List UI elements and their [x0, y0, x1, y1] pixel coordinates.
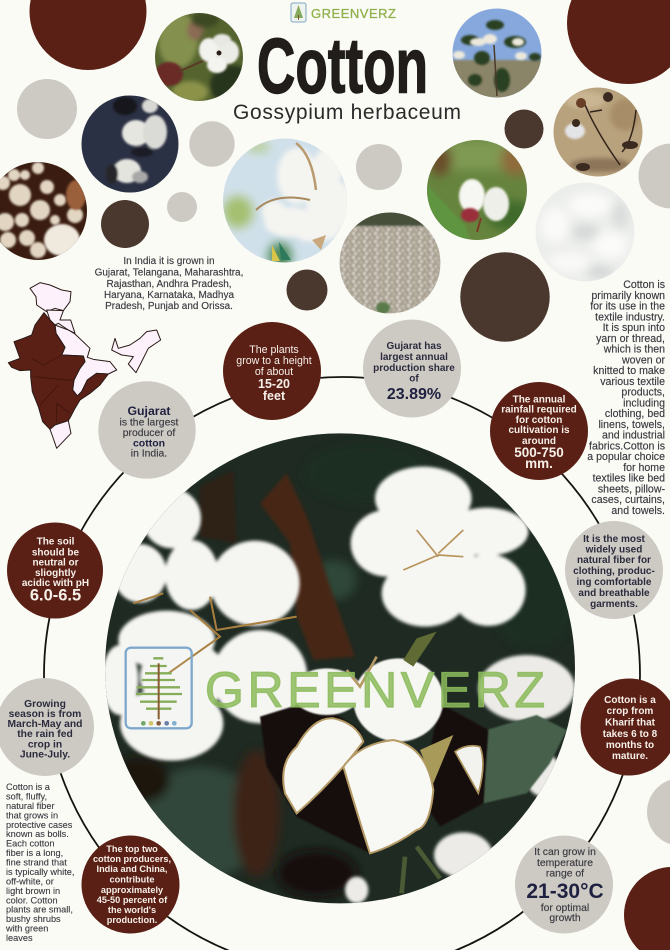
- info circle: most used natural fibre: ing comfortable: [576, 577, 652, 588]
- info circle: Gujarat largest producer: Gujarat: [127, 404, 171, 418]
- text: where cotton is grown in India: Pradesh, Punjab and Orissa.: [105, 301, 233, 312]
- text: what cotton is: light brown in: [6, 886, 60, 896]
- text: what cotton is: off-white, or: [6, 876, 54, 886]
- info circle: Kharif crop: Kharif that: [605, 718, 656, 728]
- info circle: most used natural fibre: garments.: [590, 599, 638, 610]
- info circle: top two producers: 45-50 percent of: [97, 895, 168, 905]
- info circle: temperature range: It can grow in: [534, 847, 596, 858]
- subtitle: Gossypium herbaceum: [233, 101, 461, 124]
- text: uses of cotton: and towels.: [611, 505, 665, 517]
- info circle: annual rainfall: cultivation is: [508, 425, 570, 436]
- text: what cotton is: Each cotton: [6, 839, 55, 849]
- info circle: annual rainfall: for cotton: [516, 415, 562, 426]
- text: uses of cotton: fabrics.Cotton is: [589, 440, 665, 452]
- info circle: growing season: [0, 678, 94, 776]
- watermark logo box: [126, 648, 192, 728]
- info circle: annual rainfall: rainfall required: [501, 404, 577, 416]
- photo: white cotton against sky: [223, 138, 347, 262]
- brown dried leaf: [260, 473, 355, 660]
- central boll: [260, 700, 370, 853]
- text: uses of cotton: knitted to make: [593, 365, 665, 377]
- info circle: most used natural fibre: It is the most: [583, 534, 646, 545]
- photo: cotton plant under blue sky: [452, 8, 542, 100]
- text: what cotton is: natural fiber: [6, 801, 55, 811]
- info circle: soil pH: neutral or: [32, 558, 79, 568]
- info circle: Gujarat largest producer: [98, 381, 196, 479]
- text: what cotton is: leaves: [6, 933, 33, 943]
- text: uses of cotton: which is then: [603, 344, 665, 356]
- info circle: most used natural fibre: widely used: [585, 544, 642, 556]
- text: what cotton is: protective cases: [6, 820, 73, 830]
- info circle: growing season: March-May and: [8, 719, 82, 730]
- info circle: plant height: grow to a height: [236, 355, 312, 367]
- info circle: top two producers: contribute: [110, 874, 154, 884]
- text: what cotton is: fine strand that: [6, 858, 67, 868]
- info circle: Gujarat largest producer: cotton: [133, 438, 165, 450]
- info circle: growing season: Growing: [24, 699, 66, 710]
- text: uses of cotton: various textile: [600, 376, 665, 388]
- text: what cotton is: Cotton is a: [6, 782, 51, 792]
- text: where cotton is grown in India: Gujarat, Telangana, Maharashtra,: [95, 268, 243, 278]
- text: where cotton is grown in India: [95, 256, 243, 312]
- text: uses of cotton: for its use in the: [590, 300, 665, 312]
- info circle: Kharif crop: Cotton is a: [604, 695, 656, 706]
- watermark wordmark: GREENVERZ: [205, 662, 545, 718]
- info circle: temperature range: for optimal: [541, 903, 589, 914]
- text: what cotton is: [5, 782, 74, 943]
- info circle: top two producers: The top two: [106, 844, 158, 854]
- info circle: annual rainfall: mm.: [525, 456, 553, 471]
- info circle: temperature range: range of: [546, 868, 584, 880]
- text: uses of cotton: woven or: [621, 354, 665, 366]
- text: what cotton is: known as bolls.: [6, 829, 69, 839]
- info circle: most used natural fibre: clothing, produc-: [573, 566, 655, 577]
- info circle: production share: of: [409, 374, 419, 384]
- text: uses of cotton: textile industry.: [595, 311, 665, 323]
- info circle: temperature range: [515, 836, 613, 934]
- right-hand boll behind: [345, 655, 575, 903]
- info circle: Kharif crop: takes 6 to 8: [603, 729, 658, 740]
- info circle: most used natural fibre: natural fiber for: [577, 555, 651, 566]
- text: what cotton is: fiber is a long,: [6, 848, 63, 858]
- text: uses of cotton: and industrial: [602, 430, 665, 442]
- info circle: production share: 23.89%: [387, 386, 441, 403]
- info circle: production share: production share: [373, 363, 455, 374]
- info circle: annual rainfall: The annual: [513, 394, 566, 406]
- info circle: most used natural fibre: [565, 521, 663, 619]
- info circle: soil pH: [7, 522, 103, 618]
- text: where cotton is grown in India: Rajasthan, Andhra Pradesh,: [106, 279, 232, 290]
- info circle: growing season: season is from: [9, 709, 81, 720]
- info circle: soil pH: slioghtly: [35, 568, 76, 579]
- text: uses of cotton: yarn or thread,: [596, 333, 665, 345]
- info circle: Gujarat largest producer: is the largest: [120, 418, 179, 428]
- info circle: growing season: the rain fed: [17, 729, 73, 740]
- text: uses of cotton: including: [623, 397, 665, 409]
- info circle: soil pH: 6.0-6.5: [30, 586, 81, 604]
- info circle: plant height: 15-20: [258, 377, 290, 391]
- info circle: temperature range: 21-30°C: [526, 880, 604, 903]
- text: what cotton is: plants are small,: [6, 905, 73, 915]
- logo: [291, 3, 396, 22]
- info circle: temperature range: temperature: [537, 858, 593, 869]
- info circle: top two producers: cotton producers,: [93, 854, 171, 864]
- text: what cotton is: with green: [5, 924, 48, 934]
- text: what cotton is: that grows in: [6, 810, 58, 820]
- info circle: temperature range: growth: [549, 913, 581, 924]
- main cotton photo: [100, 430, 580, 910]
- photo: cotton boll on green plant: [155, 13, 243, 101]
- map of India with cotton growing states highlighted: [8, 283, 161, 448]
- text: where cotton is grown in India: In India it is grown in: [123, 256, 215, 267]
- connecting ring: [44, 377, 640, 950]
- info circle: annual rainfall: [490, 382, 588, 480]
- info circle: production share: [363, 320, 461, 418]
- info circle: top two producers: approximately: [101, 885, 164, 895]
- info circle: plant height: The plants: [249, 344, 299, 356]
- logo: GREENVERZ: [311, 6, 396, 21]
- info circle: Kharif crop: [580, 678, 670, 776]
- photo: opening cotton boll: [427, 140, 534, 240]
- info circle: Gujarat largest producer: in India.: [131, 448, 167, 460]
- dark foliage: [122, 540, 572, 902]
- info circle: soil pH: should be: [32, 548, 80, 558]
- info circle: production share: Gujarat has: [386, 341, 442, 352]
- upper right boll: [351, 467, 528, 627]
- photo: dense cotton bolls: [0, 162, 87, 260]
- info circle: most used natural fibre: and breathable: [578, 588, 650, 599]
- text: uses of cotton: cases, curtains,: [591, 494, 665, 506]
- info circle: plant height: of about: [255, 366, 293, 378]
- text: what cotton is: is typically white,: [6, 867, 74, 877]
- photo: raw cotton fibre: [535, 182, 635, 282]
- title: Cotton: [257, 22, 428, 110]
- info circle: Kharif crop: months to: [606, 740, 654, 751]
- info circle: Kharif crop: crop from: [607, 706, 653, 717]
- photo: dry cotton plant: [553, 87, 643, 177]
- text: what cotton is: color. Cotton: [6, 895, 58, 905]
- text: uses of cotton: It is spun into: [603, 322, 665, 334]
- text: uses of cotton: a popular choice: [587, 451, 665, 463]
- info circle: annual rainfall: around: [522, 436, 556, 447]
- text: uses of cotton: for home: [623, 462, 665, 474]
- text: uses of cotton: sheets, pillow-: [598, 483, 665, 495]
- info circle: plant height: [223, 322, 321, 420]
- info circle: Gujarat largest producer: producer of: [123, 428, 175, 439]
- text: uses of cotton: Cotton is: [623, 279, 665, 291]
- text: uses of cotton: primarily known: [591, 290, 665, 302]
- info circle: top two producers: the world's: [108, 905, 156, 915]
- text: uses of cotton: products,: [621, 387, 665, 399]
- info circle: growing season: crop in: [28, 740, 62, 750]
- info circle: plant height: feet: [263, 389, 286, 403]
- info circle: soil pH: The soil: [37, 536, 75, 548]
- info circle: top two producers: [82, 836, 180, 934]
- text: uses of cotton: clothing, bed: [605, 408, 665, 420]
- photo: cotton on dark blue background: [81, 95, 179, 193]
- left bolls: [102, 488, 307, 761]
- green leaf: [483, 715, 567, 803]
- text: uses of cotton: textiles like bed: [593, 473, 665, 485]
- info circle: Kharif crop: mature.: [612, 751, 648, 762]
- text: where cotton is grown in India: Haryana, Karnataka, Madhya: [104, 290, 234, 301]
- info circle: soil pH: acidic with pH: [22, 578, 89, 589]
- info circle: growing season: June-July.: [20, 750, 70, 760]
- info circle: annual rainfall: 500-750: [514, 445, 564, 460]
- text: what cotton is: bushy shrubs: [6, 914, 61, 924]
- info circle: production share: largest annual: [380, 352, 448, 363]
- text: uses of cotton: linens, towels,: [598, 419, 665, 431]
- info circle: top two producers: production.: [107, 915, 157, 925]
- photo: cotton field: [340, 212, 440, 314]
- text: what cotton is: soft, fluffy,: [6, 792, 47, 802]
- info circle: top two producers: India and China,: [97, 864, 167, 874]
- text: uses of cotton: [587, 279, 665, 517]
